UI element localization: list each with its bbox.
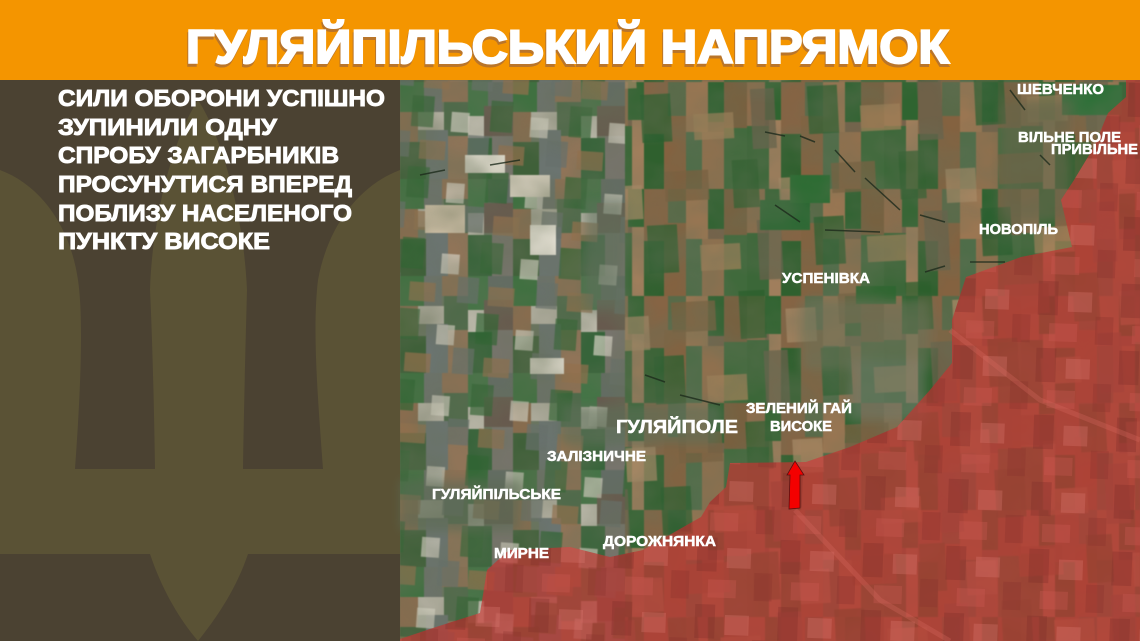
- place labels: ПРИВІЛЬНЕ: [1051, 142, 1138, 158]
- header bar: [0, 0, 1140, 80]
- text block: summary: СПРОБУ ЗАГАРБНИКІВ: [58, 142, 339, 168]
- arrow: direction of attack: [787, 461, 804, 509]
- text block: summary: ЗУПИНИЛИ ОДНУ: [58, 114, 278, 140]
- noise variation over fields: [400, 80, 1140, 641]
- text block: summary: [58, 85, 385, 254]
- place labels: НОВОПІЛЬ: [979, 222, 1058, 238]
- place labels: ШЕВЧЕНКО: [1017, 82, 1104, 98]
- place labels: ЗАЛІЗНИЧНЕ: [547, 449, 646, 465]
- place labels: УСПЕНІВКА: [782, 271, 871, 287]
- place labels: [432, 82, 1138, 562]
- text block: summary: ПУНКТУ ВИСОКЕ: [58, 228, 270, 254]
- place labels: ВІЛЬНЕ ПОЛЕ: [1018, 130, 1121, 146]
- trident emblem: [0, 100, 400, 641]
- place labels: ЗЕЛЕНИЙ ГАЙ: [746, 399, 852, 417]
- place labels: МИРНЕ: [494, 546, 549, 562]
- satellite map: [400, 80, 1140, 641]
- place labels: ВИСОКЕ: [770, 419, 832, 435]
- occupied territory (red overlay): [400, 80, 1140, 641]
- left panel background: [0, 80, 400, 641]
- place labels: ДОРОЖНЯНКА: [603, 534, 717, 550]
- place labels: ГУЛЯЙПІЛЬСЬКЕ: [432, 485, 561, 503]
- place labels: ГУЛЯЙПОЛЕ: [616, 416, 738, 437]
- title: ГУЛЯЙПІЛЬСЬКИЙ НАПРЯМОК: [186, 20, 949, 73]
- text block: summary: ПРОСУНУТИСЯ ВПЕРЕД: [58, 171, 352, 197]
- text block: summary: ПОБЛИЗУ НАСЕЛЕНОГО: [58, 200, 352, 226]
- text block: summary: СИЛИ ОБОРОНИ УСПІШНО: [58, 85, 385, 111]
